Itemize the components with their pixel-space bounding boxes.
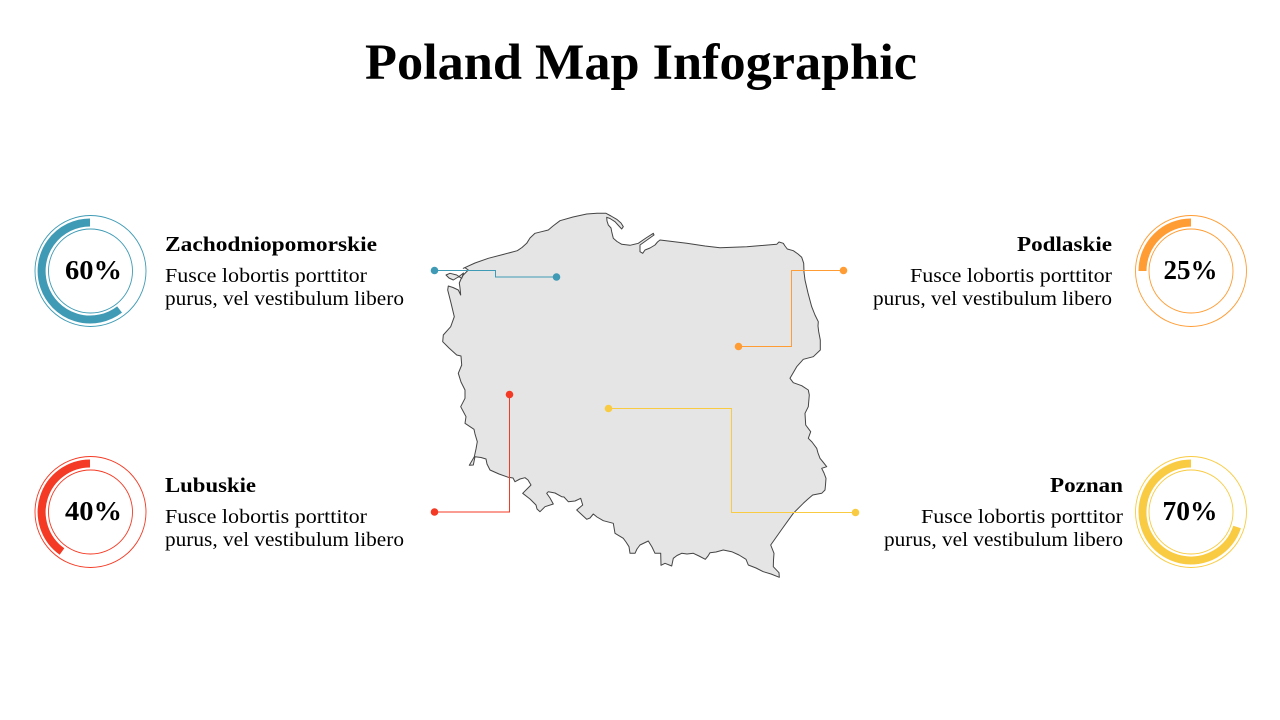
connector: Podlaskie (735, 267, 847, 350)
body text (884, 506, 1123, 551)
body text: Fusce lobortis porttitor (910, 265, 1112, 287)
panel: Podlaskie (873, 216, 1246, 326)
body text (165, 506, 404, 551)
value: 60% (65, 255, 122, 285)
panel: Lubuskie (35, 456, 404, 568)
ring: 40% (35, 456, 146, 568)
connector: Lubuskie (431, 391, 513, 516)
body text: purus, vel vestibulum libero (884, 529, 1123, 551)
heading: Lubuskie (165, 473, 256, 497)
value: 40% (65, 496, 122, 526)
body text (873, 265, 1112, 310)
value: 70% (1162, 496, 1218, 526)
body text: purus, vel vestibulum libero (165, 288, 404, 310)
body text (165, 265, 404, 310)
body text: Fusce lobortis porttitor (921, 506, 1123, 528)
body text: Fusce lobortis porttitor (165, 265, 367, 287)
body text: Fusce lobortis porttitor (165, 506, 367, 528)
ring: 70% (1136, 456, 1246, 568)
map: lagoon islet (446, 273, 464, 280)
ring: 25% (1136, 216, 1246, 326)
panel: Poznan (884, 456, 1246, 568)
map of Poland (443, 213, 827, 577)
heading: Poznan (1050, 473, 1123, 497)
value: 25% (1164, 255, 1218, 285)
heading: Zachodniopomorskie (165, 232, 377, 256)
panel: Zachodniopomorskie (35, 216, 404, 326)
heading: Podlaskie (1017, 232, 1112, 256)
connector: Poznan (605, 405, 859, 516)
body text: purus, vel vestibulum libero (165, 529, 404, 551)
body text: purus, vel vestibulum libero (873, 288, 1112, 310)
ring: 60% (35, 216, 146, 326)
connector: Zachodniopomorskie (431, 267, 560, 281)
title: Poland Map Infographic (365, 35, 917, 91)
